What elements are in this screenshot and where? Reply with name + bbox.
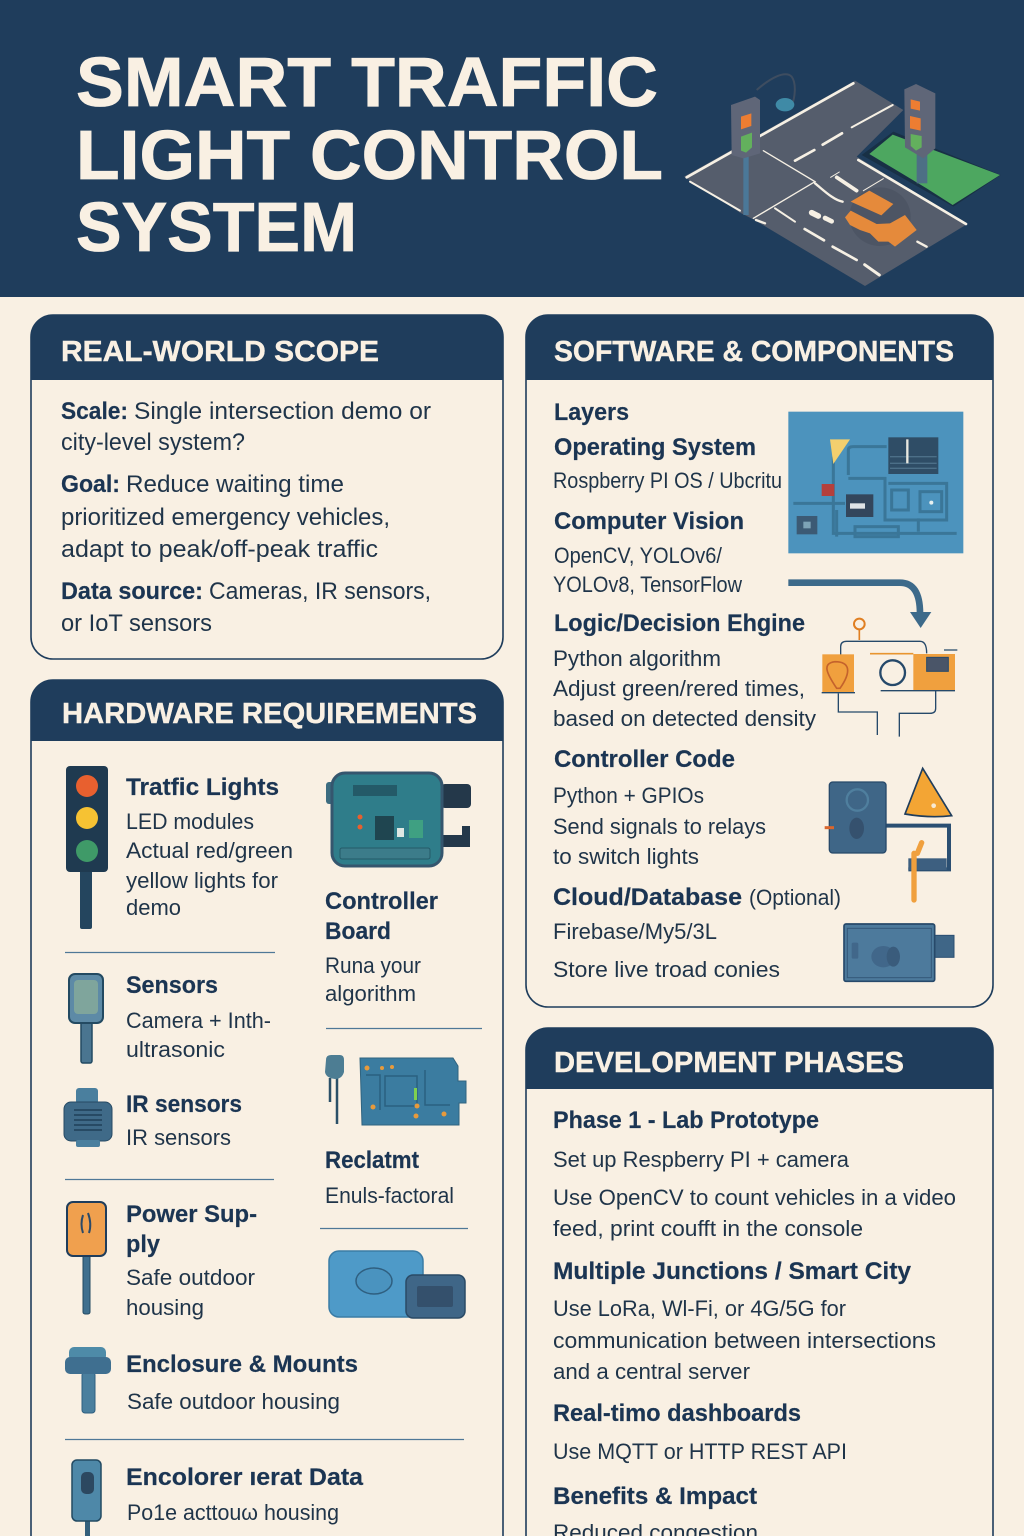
- icon: controller hardware: [825, 768, 952, 900]
- item: traffic lights: Tratfic Lights: [126, 774, 279, 801]
- text block: phases: Benefits & Impact: [553, 1483, 757, 1510]
- item: controller board: algorithm: [325, 981, 416, 1006]
- text block: phases: Use OpenCV to count vehicles in a video: [553, 1185, 956, 1210]
- item: enclosure and mounts: Enclosure & Mounts: [126, 1351, 358, 1378]
- item: enclosure and mounts: [126, 1351, 358, 1414]
- icon: logic diagram: [822, 619, 957, 737]
- text block: layers: Store live troad conies: [553, 957, 780, 982]
- text block: scope details: Goal:: [61, 471, 120, 498]
- heading: REAL-WORLD SCOPE: [61, 336, 379, 368]
- heading: DEVELOPMENT PHASES: [554, 1047, 904, 1079]
- item: encolorer: Po1e acttouω housing: [127, 1500, 339, 1525]
- item: traffic lights: LED modules: [126, 809, 254, 834]
- item: enclosure and mounts: Safe outdoor housing: [127, 1389, 340, 1414]
- item: encolorer: [126, 1464, 364, 1525]
- title: [76, 43, 663, 266]
- text block: layers: to switch lights: [553, 844, 699, 869]
- text block: layers: Computer Vision: [554, 508, 744, 535]
- item: sensors: [126, 972, 271, 1062]
- icon: blue enclosure: [329, 1251, 465, 1318]
- text block: layers: Send signals to relays: [553, 814, 766, 839]
- text block: phases: communication between intersections: [553, 1328, 936, 1353]
- item: IR sensors: IR sensors: [126, 1091, 242, 1118]
- icon: pole enclosure: [72, 1460, 101, 1536]
- text block: layers: Adjust green/rered times,: [553, 676, 805, 701]
- text block: layers: Python algorithm: [553, 646, 721, 671]
- title: SYSTEM: [76, 188, 357, 266]
- text block: scope details: [61, 398, 431, 637]
- text block: scope details: or IoT sensors: [61, 610, 212, 637]
- panel: development phases: [526, 1028, 993, 1536]
- item: controller board: Controller: [325, 888, 438, 915]
- item: traffic lights: yellow lights for: [126, 868, 278, 893]
- text block: layers: Python + GPIOs: [553, 783, 704, 808]
- item: reclamation: Enuls-factoral: [325, 1183, 454, 1208]
- item: reclamation: [325, 1147, 454, 1208]
- icon: traffic light: [66, 766, 108, 929]
- icon: circuit board image: [788, 412, 963, 553]
- icon: board with probe: [325, 1055, 466, 1125]
- heading: SOFTWARE & COMPONENTS: [554, 336, 954, 368]
- item: sensors: ultrasonic: [126, 1037, 225, 1062]
- panel: real-world scope: [31, 315, 503, 659]
- icon: power supply: [67, 1202, 106, 1314]
- item: power supply: Power Sup-: [126, 1201, 257, 1228]
- text block: scope details: Scale:: [61, 398, 128, 425]
- text block: phases: Set up Respberry PI + camera: [553, 1147, 850, 1172]
- icon: database device: [844, 924, 954, 981]
- icon: controller board: [326, 773, 471, 866]
- text block: layers: (Optional): [749, 885, 841, 910]
- item: encolorer: Encolorer ıerat Data: [126, 1464, 364, 1491]
- text block: phases: Multiple Junctions / Smart City: [553, 1258, 912, 1285]
- header banner: [0, 0, 1024, 297]
- text block: scope details: adapt to peak/off-peak traffic: [61, 536, 378, 563]
- icon: isometric intersection: [684, 74, 1001, 286]
- item: power supply: ply: [126, 1231, 161, 1258]
- text block: scope details: Cameras, IR sensors,: [209, 578, 431, 605]
- text block: layers: Rospberry PI OS / Ubcritu: [553, 468, 782, 493]
- text block: layers: OpenCV, YOLOv6/: [554, 543, 723, 568]
- text block: layers: [553, 399, 841, 982]
- text block: layers: Logic/Decision Ehgine: [554, 610, 805, 637]
- text block: phases: [553, 1107, 956, 1536]
- arrow: curved flow: [788, 583, 931, 628]
- panel: hardware requirements: [31, 680, 503, 1536]
- item: sensors: Camera + Inth-: [126, 1008, 271, 1033]
- text block: layers: YOLOv8, TensorFlow: [553, 572, 742, 597]
- item: IR sensors: [126, 1091, 242, 1150]
- text block: phases: and a central server: [553, 1359, 750, 1384]
- item: traffic lights: demo: [126, 895, 181, 920]
- title: SMART TRAFFIC: [76, 43, 658, 121]
- icon: IR sensor: [64, 1088, 112, 1147]
- item: traffic lights: Actual red/green: [126, 838, 293, 863]
- item: controller board: Board: [325, 918, 391, 945]
- text block: scope details: prioritized emergency vehicles,: [61, 504, 390, 531]
- item: power supply: housing: [126, 1295, 204, 1320]
- text block: phases: Use MQTT or HTTP REST API: [553, 1439, 847, 1464]
- text block: scope details: Single intersection demo or: [134, 398, 431, 425]
- text block: layers: Firebase/My5/3L: [553, 919, 717, 944]
- text block: layers: Operating System: [554, 434, 756, 461]
- icon: enclosure mount: [65, 1347, 111, 1413]
- item: traffic lights: [126, 774, 293, 920]
- text block: scope details: Reduce waiting time: [126, 471, 344, 498]
- item: sensors: Sensors: [126, 972, 218, 999]
- title: LIGHT CONTROL: [76, 116, 663, 194]
- text block: phases: Real-timo dashboards: [553, 1400, 801, 1427]
- text block: scope details: Data source:: [61, 578, 203, 605]
- item: IR sensors: IR sensors: [126, 1125, 231, 1150]
- text block: phases: Phase 1 - Lab Prototype: [553, 1107, 819, 1134]
- text block: layers: Controller Code: [554, 746, 735, 773]
- heading: HARDWARE REQUIREMENTS: [62, 698, 477, 730]
- text block: layers: Layers: [554, 399, 629, 426]
- item: power supply: [126, 1201, 257, 1320]
- text block: layers: Cloud/Database: [553, 884, 742, 911]
- item: controller board: [325, 888, 438, 1006]
- text block: phases: Use LoRa, Wl-Fi, or 4G/5G for: [553, 1296, 846, 1321]
- panel: software and components: [526, 315, 993, 1007]
- icon: camera sensor: [69, 974, 103, 1063]
- text block: phases: feed, print coufft in the console: [553, 1216, 863, 1241]
- text block: scope details: city-level system?: [61, 429, 245, 456]
- item: controller board: Runa your: [325, 953, 421, 978]
- text block: layers: based on detected density: [553, 706, 816, 731]
- item: power supply: Safe outdoor: [126, 1265, 255, 1290]
- item: reclamation: Reclatmt: [325, 1147, 419, 1174]
